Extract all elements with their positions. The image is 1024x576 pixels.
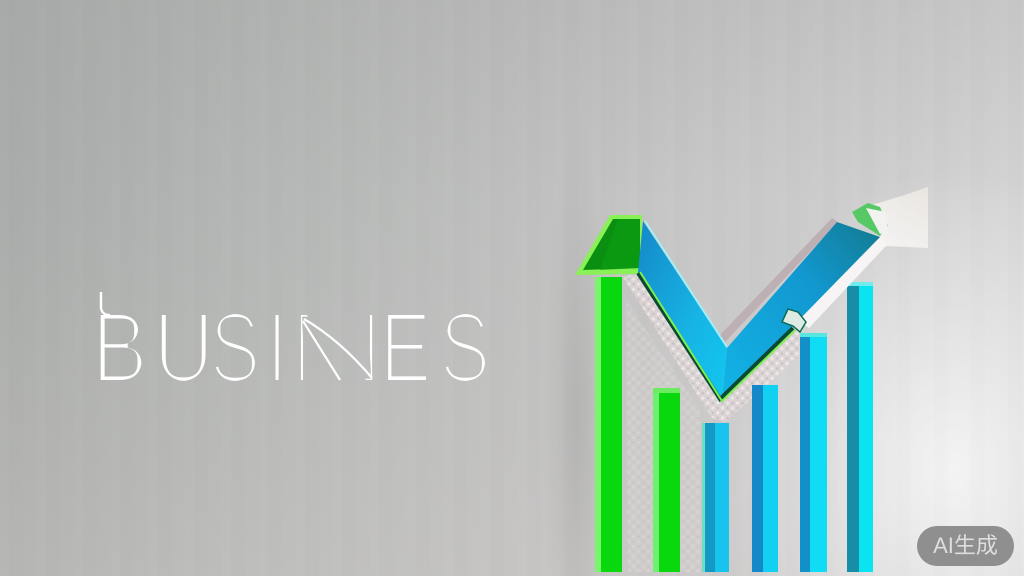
title: BUSINES: S — [440, 291, 491, 403]
badge: AI生成 — [917, 526, 1014, 566]
pale tiled panel behind the bars — [626, 300, 700, 572]
badge: AI生成: AI生成 — [933, 533, 998, 558]
bar 1 — [595, 277, 622, 572]
title accent: N diagonals — [303, 319, 372, 380]
arrow shaft: right arm — [722, 222, 880, 400]
tiled shadow band beneath the arrow — [623, 272, 812, 422]
zigzag growth arrow — [575, 187, 928, 401]
arrow tip: white — [852, 187, 928, 248]
title: BUSINES: E — [380, 291, 431, 403]
title: BUSINES: B — [92, 291, 148, 404]
bar chart — [595, 277, 873, 572]
title: BUSINES: I — [267, 291, 287, 403]
arrow head: green — [575, 215, 642, 275]
title: BUSINES: U — [153, 291, 214, 404]
shaft outline: bright green — [640, 272, 795, 401]
shaft outline: green lower edge — [638, 273, 793, 399]
bar 6 — [847, 282, 873, 572]
bar 5 — [800, 333, 827, 572]
title: BUSINES: S — [210, 291, 261, 403]
bar 3 — [702, 423, 729, 572]
bar 4 — [752, 385, 778, 572]
title: BUSINES — [92, 287, 491, 409]
shaft notch — [782, 309, 806, 332]
arrow shaft: left arm — [638, 221, 727, 400]
title accent: B ascender — [101, 292, 110, 315]
bar 2 — [653, 388, 680, 572]
title: BUSINES: N — [284, 287, 389, 409]
pale upper edge of arrow shaft — [720, 218, 838, 342]
shaft outline: pale cyan edge — [645, 221, 727, 347]
white edge of arrow shaft — [795, 236, 886, 328]
